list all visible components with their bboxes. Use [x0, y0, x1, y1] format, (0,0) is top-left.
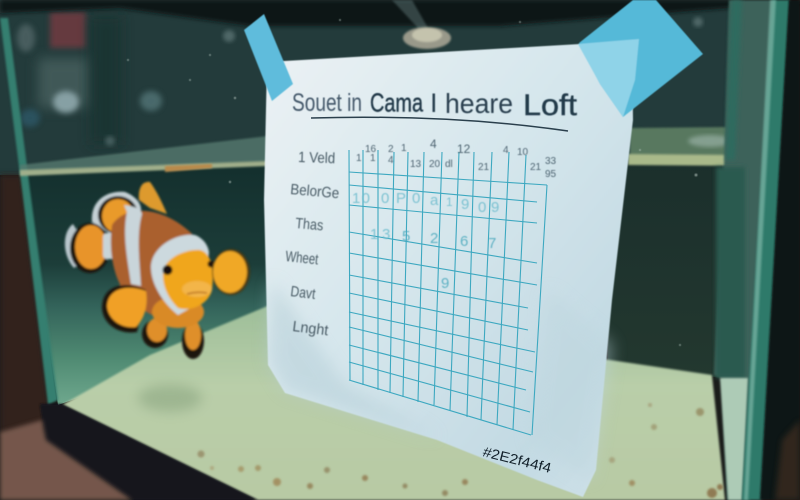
row labels: Davt	[290, 283, 317, 303]
fish left pectoral fin	[102, 285, 147, 333]
tape left	[244, 14, 293, 101]
fish lower tail fin	[65, 223, 115, 273]
table values: 3	[382, 226, 390, 243]
title: Souet in	[292, 89, 362, 117]
water line band right	[628, 127, 762, 166]
table values: 9	[491, 199, 499, 216]
row labels	[285, 149, 340, 339]
fish mouth	[182, 281, 212, 297]
fish head stripe	[151, 235, 209, 315]
table values: 9	[461, 196, 469, 213]
column numbers: 2	[388, 144, 394, 155]
fish upper tail fin	[92, 192, 141, 238]
water right	[608, 160, 722, 378]
column numbers	[356, 137, 557, 180]
title: Loft	[523, 89, 578, 122]
column numbers: 4	[503, 145, 509, 156]
tank bottom frame	[40, 404, 258, 500]
column numbers: 21	[530, 162, 542, 173]
column numbers: 1	[370, 153, 376, 164]
fish eyes	[162, 260, 214, 275]
paper note	[264, 41, 633, 497]
row labels: 1 Veld	[298, 149, 335, 167]
fish face	[163, 250, 213, 309]
table values	[352, 190, 499, 292]
left outer wall	[0, 175, 50, 435]
suction cup	[392, 0, 451, 49]
table values: 1	[446, 195, 453, 209]
fish dorsal fin	[139, 182, 167, 214]
column numbers: 20	[429, 159, 441, 170]
table values: a	[430, 192, 439, 209]
top dark rim	[0, 0, 800, 26]
table values: 0	[381, 190, 389, 207]
row labels: Thas	[295, 215, 324, 234]
column numbers: 4	[388, 155, 394, 166]
title: heare	[445, 88, 513, 119]
table grid	[349, 150, 547, 435]
table values: 0	[478, 199, 486, 216]
table values: 5	[402, 228, 410, 245]
column numbers: 12	[457, 142, 471, 156]
fish lower belly	[152, 296, 204, 328]
tape right	[578, 0, 703, 117]
fish lower fins	[142, 318, 204, 359]
column numbers: dl	[445, 159, 453, 170]
column numbers: 33	[545, 156, 557, 167]
water line band left	[20, 136, 268, 176]
clownfish	[65, 182, 250, 359]
paper fold shading	[530, 290, 612, 480]
color code note: #2E2f44f4	[481, 443, 553, 476]
wooden stand	[0, 420, 132, 500]
row labels: Wheet	[285, 248, 320, 268]
suspended particles	[127, 19, 698, 346]
row labels: BelorGe	[290, 181, 340, 202]
fish body	[111, 211, 201, 320]
table values: 0	[412, 190, 420, 207]
title	[292, 88, 578, 122]
column numbers: 21	[478, 162, 490, 173]
table values: 2	[430, 230, 438, 247]
column numbers: 95	[545, 169, 557, 180]
title underline	[311, 117, 568, 131]
table values: 7	[488, 235, 496, 252]
blurred room reflections	[17, 12, 703, 146]
table values: P	[396, 190, 406, 207]
row labels: Lnght	[292, 318, 330, 339]
sand specks	[198, 403, 723, 498]
left glass edge	[0, 18, 58, 405]
column numbers: 13	[410, 159, 422, 170]
tank right glass frame	[714, 0, 800, 500]
column numbers: 10	[517, 147, 529, 158]
paper shading	[268, 280, 440, 438]
title: I	[430, 88, 438, 118]
fish body stripe	[124, 205, 142, 286]
column numbers: 16	[365, 144, 377, 155]
column numbers: 1	[356, 153, 362, 164]
water left	[22, 160, 270, 405]
fish right pectoral fin	[212, 249, 250, 295]
table values: 10	[352, 190, 370, 207]
table values: 1	[370, 226, 378, 243]
table values: 9	[441, 275, 449, 292]
fish shadow on sand	[138, 384, 202, 412]
title: Cama	[370, 88, 423, 118]
column numbers: 1	[401, 143, 407, 154]
table values: 6	[460, 233, 468, 250]
column numbers: 4	[430, 137, 437, 151]
sand floor	[62, 305, 725, 500]
